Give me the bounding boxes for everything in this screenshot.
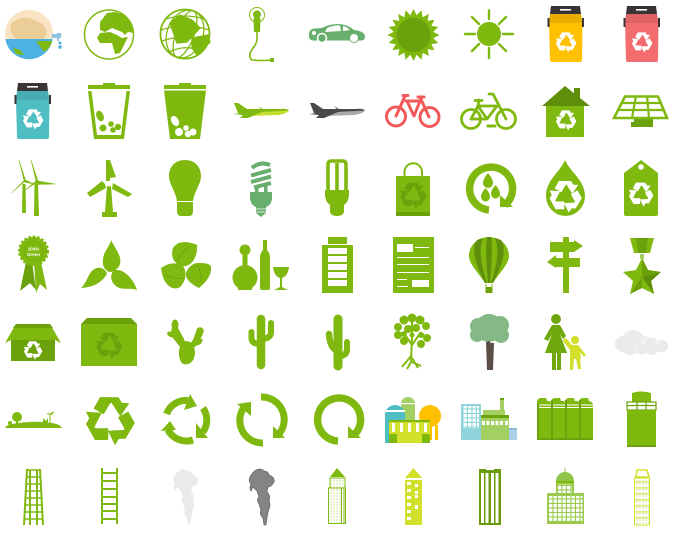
icon: landscape [5, 412, 62, 428]
icon: circular arrow with water drops [470, 167, 513, 210]
icon: sun with rays [465, 10, 513, 58]
icon: grey plane [309, 103, 365, 118]
icon: storage tank [627, 392, 656, 447]
icon: tree with brown trunk [470, 314, 509, 370]
icon: bottles and glass [232, 240, 289, 290]
icon: large wind turbine [87, 160, 132, 217]
icon: 100% green rosette [19, 236, 48, 293]
icon: three pointed leaves [81, 240, 137, 290]
icon: earth with tap [5, 10, 62, 59]
icon: 100% green rosette: Green [27, 252, 40, 257]
icon: domed building [547, 468, 584, 524]
icon: red recycling bin [624, 6, 660, 62]
icon: signpost [547, 237, 583, 293]
icon: leafy tree with roots [394, 314, 431, 369]
icon: star medal [623, 238, 661, 294]
icon: colourful factory [385, 397, 441, 443]
icon: grey smoke [249, 469, 274, 525]
icon: car [309, 24, 365, 42]
icon: row of tanks [537, 398, 593, 440]
icon: light bulb [169, 160, 201, 216]
icon: red bicycle [386, 96, 439, 126]
icon: spiky sun [388, 9, 440, 61]
icon: 100% green rosette: 100% [28, 246, 39, 252]
icon: document [393, 237, 434, 293]
icon: green bicycle [462, 94, 516, 128]
icon: two chasing arrows [237, 397, 285, 443]
icon: outlined skyscraper [328, 468, 346, 524]
icon: saguaro cactus [252, 319, 271, 365]
icon: water drop with recycling [546, 160, 585, 216]
icon: globe africa [84, 10, 134, 59]
icon: mother and child [544, 314, 586, 370]
icon: house with recycling [542, 86, 590, 137]
icon: clouds [615, 330, 668, 355]
icon: circular arrow [318, 398, 361, 441]
icon: three heart leaves [161, 242, 211, 288]
icon: straight ladder [102, 468, 117, 524]
icon: yellow recycling bin [548, 6, 584, 62]
icon: solar panel [614, 96, 667, 127]
icon: tube CFL bulb [325, 161, 349, 216]
icon: pale yellow skyscraper [634, 470, 650, 525]
icon: prickly pear cactus [166, 320, 204, 364]
icon: shopping bag [396, 163, 430, 216]
icon: bulb plug [250, 8, 274, 62]
icon: closed recycling box [81, 318, 137, 366]
icon: tapered ladder [24, 469, 43, 525]
icon: yellow skyscraper [405, 468, 422, 525]
icon: filled trash can [164, 83, 206, 139]
icon: teal recycling bin [14, 83, 51, 139]
icon: three chasing arrows [161, 394, 208, 441]
icon: wire globe [160, 5, 210, 63]
icon: green plane [233, 103, 289, 118]
icon: spiral CFL plug bulb [250, 164, 272, 217]
icon: two wind turbines [12, 160, 55, 216]
icon: white smoke [173, 469, 198, 525]
icon: outline trash can [88, 83, 130, 139]
icon: office and factory [461, 398, 517, 440]
icon: tall cactus [329, 319, 347, 366]
icon: tag with recycling [624, 160, 658, 216]
icon: open recycling box [5, 324, 61, 361]
icon: hot air balloon [469, 237, 509, 293]
icon: large recycling symbol [86, 389, 139, 445]
icon: dark striped skyscraper [479, 469, 501, 525]
icon: battery [322, 237, 353, 293]
